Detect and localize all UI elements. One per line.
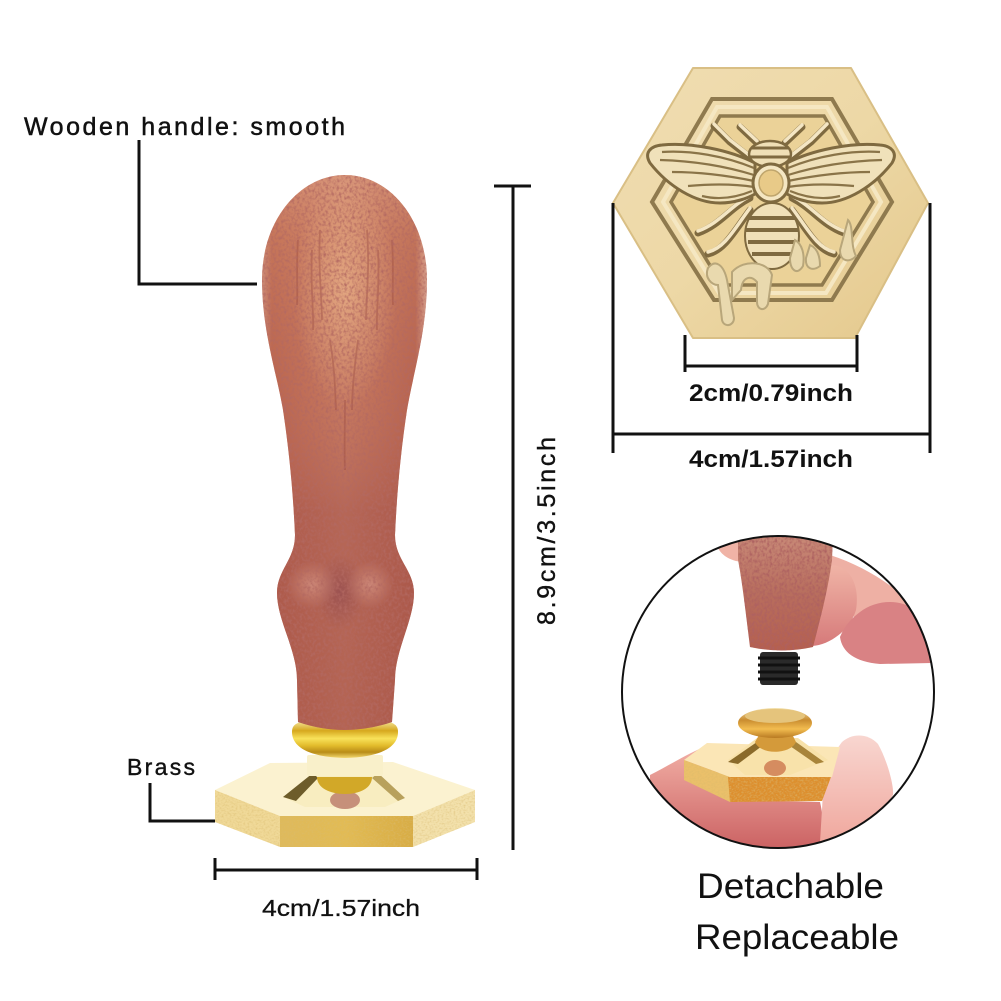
hexagon frame xyxy=(652,99,892,300)
wood reflection xyxy=(330,791,360,809)
dimension: seal inner width xyxy=(685,335,857,407)
label: brass: Brass xyxy=(127,754,195,780)
label: brass xyxy=(127,754,215,821)
stud xyxy=(728,738,828,775)
abdomen xyxy=(745,203,799,269)
base top plate xyxy=(215,762,475,816)
dimension: total height xyxy=(494,186,561,850)
caption: detachable replaceable: Detachable xyxy=(697,867,884,906)
right thumb xyxy=(820,735,893,842)
stamp face: bee hexagon xyxy=(613,68,928,338)
base side faces xyxy=(215,790,280,847)
brass base xyxy=(215,719,475,847)
top fingers xyxy=(718,542,738,562)
dimension: base width xyxy=(215,858,477,921)
dimension: total height: 8.9cm/3.5inch xyxy=(533,437,561,625)
dimension: seal inner width: 2cm/0.79inch xyxy=(689,380,853,407)
gold bulb xyxy=(317,777,372,794)
neck band xyxy=(307,755,383,776)
label: wooden handle xyxy=(24,113,345,284)
dimension: seal outer width: 4cm/1.57inch xyxy=(689,446,853,473)
stud cap xyxy=(738,708,812,738)
dimension: seal outer width xyxy=(613,203,930,473)
label: wooden handle: Wooden handle: smooth xyxy=(24,113,345,141)
upper and lower legs xyxy=(698,126,844,254)
detachable detail circle xyxy=(622,535,945,860)
wooden handle xyxy=(262,175,427,730)
neck cone xyxy=(283,774,405,807)
caption: detachable replaceable: Replaceable xyxy=(695,918,899,957)
wooden handle end xyxy=(738,535,833,650)
bottom left finger xyxy=(650,750,822,847)
threaded screw xyxy=(758,652,800,685)
brass plate xyxy=(684,743,840,777)
dimension: base width: 4cm/1.57inch xyxy=(262,895,420,921)
base front face xyxy=(280,816,413,847)
collar ring xyxy=(292,719,398,758)
thorax xyxy=(753,164,789,202)
caption: detachable replaceable xyxy=(695,867,899,957)
wings xyxy=(648,144,894,203)
head xyxy=(749,141,791,167)
bee xyxy=(648,124,894,269)
honey drips xyxy=(707,220,856,325)
